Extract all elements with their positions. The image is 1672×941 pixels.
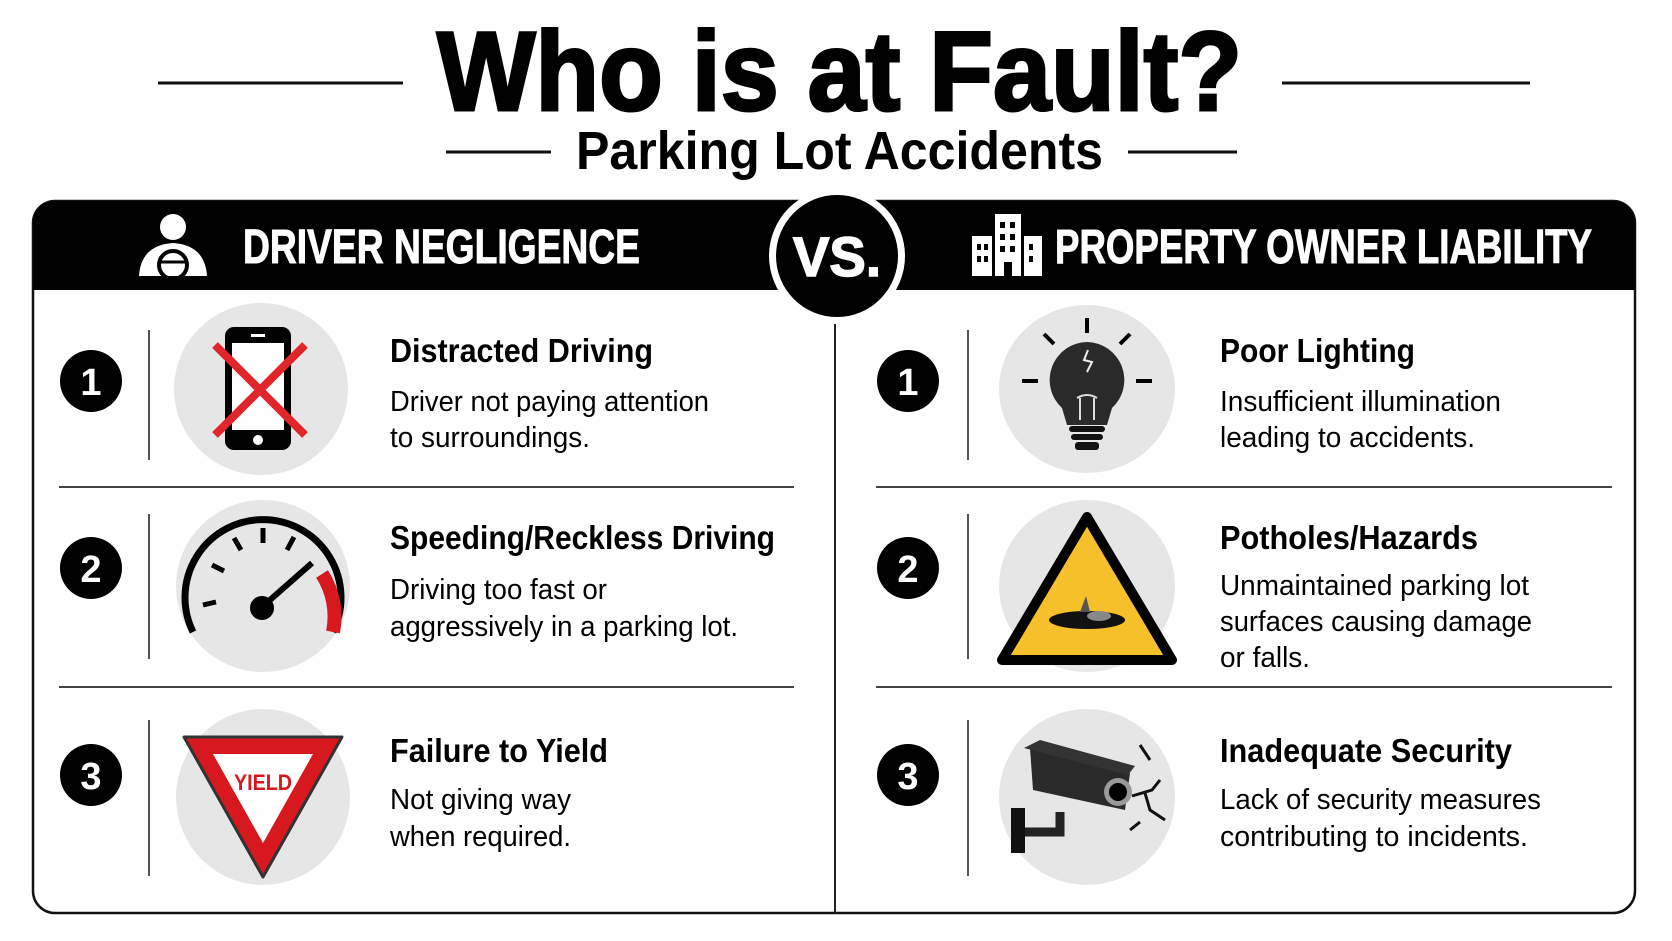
right item 3: inadequate security: Inadequate Security bbox=[1220, 732, 1513, 769]
right item 2: potholes: Potholes/Hazards bbox=[1220, 519, 1478, 556]
header: driver negligence bbox=[139, 214, 640, 279]
left item 3: failure to yield: Failure to Yield bbox=[390, 732, 608, 769]
left item 3: failure to yield: when required. bbox=[389, 821, 571, 853]
right item 3: inadequate security: contributing to incidents. bbox=[1220, 821, 1528, 853]
left item 2: speeding: aggressively in a parking lot. bbox=[390, 611, 738, 643]
header: property owner liability bbox=[972, 214, 1592, 276]
right item 1: poor lighting: 1 bbox=[897, 362, 919, 404]
left item 2: speeding: Driving too fast or bbox=[390, 574, 607, 606]
main panel bbox=[33, 201, 1635, 913]
right item 1: poor lighting: leading to accidents. bbox=[1220, 422, 1475, 454]
right item 2: potholes: Unmaintained parking lot bbox=[1220, 570, 1529, 602]
right item 3: inadequate security: 3 bbox=[897, 756, 919, 798]
left item 1: distracted driving bbox=[60, 303, 709, 475]
left item 1: distracted driving: Distracted Driving bbox=[390, 332, 653, 369]
header: driver negligence: DRIVER NEGLIGENCE bbox=[243, 221, 640, 274]
left item 3: failure to yield: Not giving way bbox=[390, 784, 571, 816]
right item 2: potholes: 2 bbox=[897, 549, 919, 591]
right item 1: poor lighting: Poor Lighting bbox=[1220, 332, 1415, 369]
left item 1: distracted driving: 1 bbox=[80, 362, 102, 404]
title: Who is at Fault? bbox=[437, 9, 1242, 134]
subtitle: Parking Lot Accidents bbox=[576, 121, 1103, 181]
right item 2: potholes: or falls. bbox=[1220, 642, 1310, 674]
left item 2: speeding bbox=[60, 500, 775, 672]
VS badge: VS. bbox=[793, 225, 881, 288]
icon: security camera bbox=[999, 709, 1175, 885]
left item 3: failure to yield: 3 bbox=[80, 756, 102, 798]
left item 1: distracted driving: Driver not paying attention bbox=[390, 386, 709, 418]
left item 2: speeding: Speeding/Reckless Driving bbox=[390, 519, 775, 556]
icon: phone with red x bbox=[174, 303, 348, 475]
right item 1: poor lighting bbox=[877, 305, 1501, 473]
right item 2: potholes: surfaces causing damage bbox=[1220, 606, 1532, 638]
right item 2: potholes bbox=[877, 500, 1532, 674]
icon: driver bbox=[139, 214, 207, 279]
icon: broken light bulb bbox=[999, 305, 1175, 473]
icon: yield sign bbox=[176, 709, 350, 885]
left item 1: distracted driving: to surroundings. bbox=[390, 422, 590, 454]
icon: speedometer bbox=[176, 500, 350, 672]
left item 2: speeding: 2 bbox=[80, 549, 102, 591]
icon: yield sign: YIELD bbox=[234, 770, 292, 795]
VS badge bbox=[769, 188, 905, 324]
left item 3: failure to yield bbox=[60, 709, 608, 885]
icon: building bbox=[972, 214, 1042, 276]
right item 3: inadequate security bbox=[877, 709, 1541, 885]
icon: hazard triangle bbox=[999, 500, 1175, 672]
right item 3: inadequate security: Lack of security measures bbox=[1220, 784, 1541, 816]
right item 1: poor lighting: Insufficient illumination bbox=[1220, 386, 1501, 418]
